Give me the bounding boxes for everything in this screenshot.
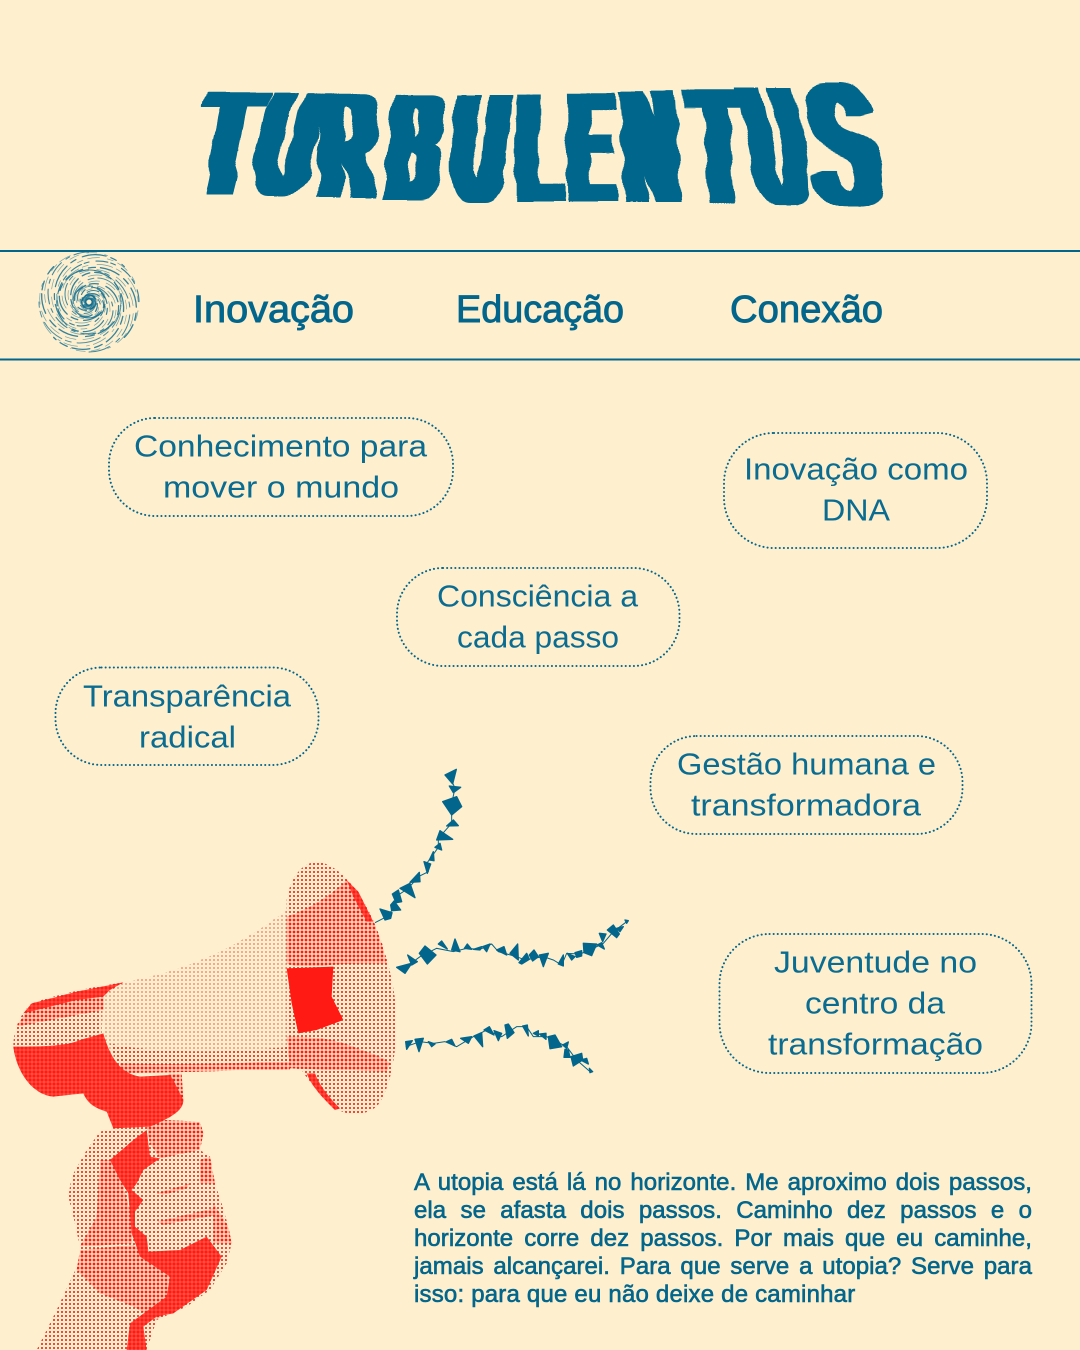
title: U: [239, 60, 337, 228]
title: T: [686, 52, 750, 239]
pill: Consciência a cada passo: cada passo: [457, 620, 619, 654]
icon: spiral: [25, 238, 153, 366]
title: [184, 49, 891, 243]
pill: Gestão humana e transformadora: [650, 736, 962, 834]
pill: Juventude no centro da transformação: [720, 934, 1032, 1073]
quote paragraph: isso: para que eu não deixe de caminhar: [414, 1281, 855, 1308]
navigation labels: Conexão: [730, 289, 883, 331]
title: N: [618, 53, 682, 237]
wave: middle: [397, 920, 628, 973]
pill: Transparência radical: radical: [139, 720, 236, 754]
pill: Inovação como DNA: DNA: [822, 492, 890, 528]
wave: lower: [406, 1024, 593, 1073]
title: U: [448, 57, 510, 233]
pill: Conhecimento para mover o mundo: Conhecimento para: [134, 428, 428, 464]
pill: Inovação como DNA: [724, 433, 987, 548]
title: B: [380, 58, 450, 231]
quote paragraph: ela se afasta dois passos. Caminho dez passos e o: [414, 1197, 1032, 1224]
title: L: [517, 58, 560, 235]
quote paragraph: horizonte corre dez passos. Por mais que eu caminhe,: [414, 1225, 1032, 1252]
sound waves: [375, 769, 628, 1073]
title: S: [796, 49, 891, 243]
pill: Transparência radical: [56, 668, 318, 765]
pill: Conhecimento para mover o mundo: [109, 418, 453, 516]
pill: Gestão humana e transformadora: Gestão humana e: [677, 746, 936, 782]
megaphone body: [13, 862, 397, 1128]
header band: [0, 238, 1080, 366]
pill: Consciência a cada passo: [397, 568, 680, 666]
pill: Juventude no centro da transformação: centro da: [805, 986, 946, 1020]
pill: Gestão humana e transformadora: transformadora: [691, 788, 922, 822]
navigation labels: [193, 289, 883, 331]
title: U: [731, 51, 821, 241]
navigation labels: Inovação: [193, 289, 354, 331]
navigation labels: Educação: [456, 289, 624, 331]
wave: upper: [375, 769, 462, 923]
quote paragraph: A utopia está lá no horizonte. Me aproximo dois passos,: [414, 1169, 1032, 1196]
pill: Conhecimento para mover o mundo: mover o mundo: [163, 470, 399, 504]
title: R: [314, 60, 382, 230]
illustration: megaphone and hand: [13, 862, 397, 1350]
pill: Inovação como DNA: Inovação como: [744, 452, 968, 486]
quote paragraph: jamais alcançarei. Para que serve a utopia? Serve para: [414, 1253, 1032, 1280]
title: E: [567, 57, 614, 236]
pill: Juventude no centro da transformação: transformação: [768, 1026, 983, 1062]
hand: [37, 1120, 232, 1350]
pill: Consciência a cada passo: Consciência a: [437, 578, 639, 614]
pill: Juventude no centro da transformação: Juventude no: [774, 944, 977, 980]
title: T: [184, 61, 272, 229]
pill: Transparência radical: Transparência: [83, 678, 292, 714]
quote paragraph: [413, 1169, 1032, 1308]
